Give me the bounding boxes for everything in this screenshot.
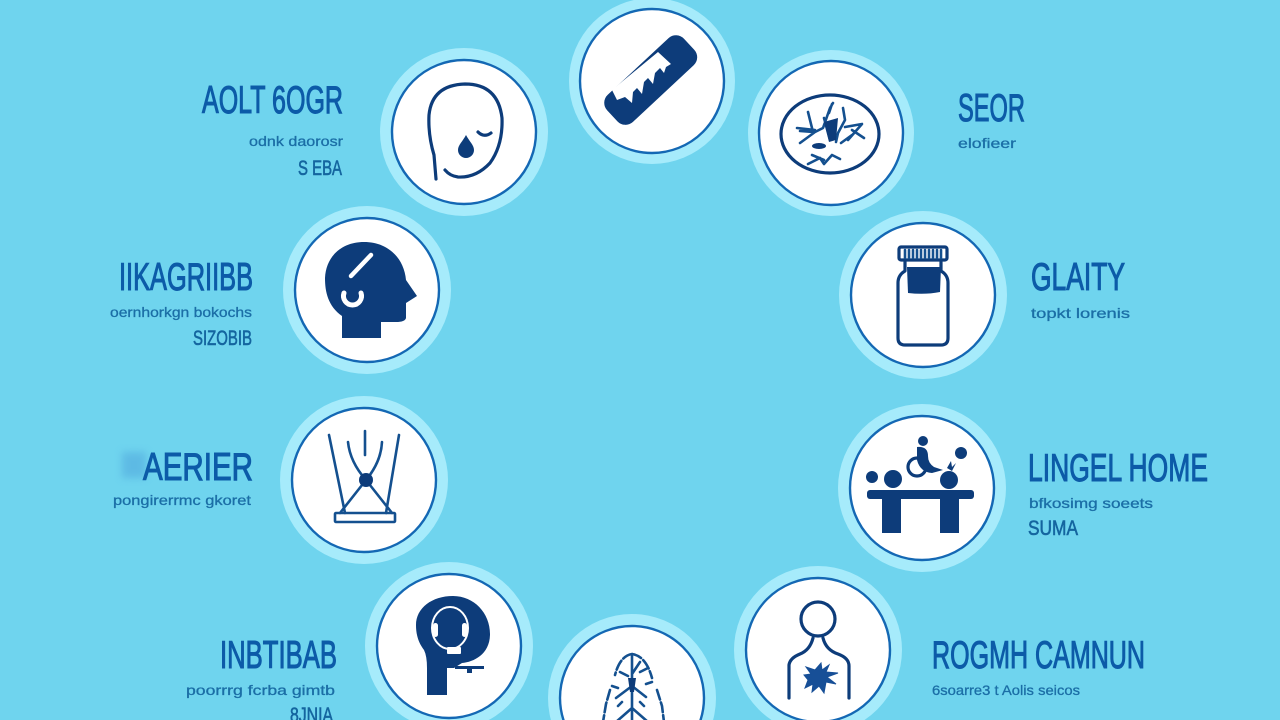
ring xyxy=(839,211,1007,379)
heading: GLAITY xyxy=(1031,256,1125,299)
ring xyxy=(283,206,451,374)
disc xyxy=(746,578,890,720)
subtext: odnk daorosr xyxy=(249,133,343,149)
icon: hanging swing xyxy=(329,431,399,522)
disc xyxy=(851,223,995,367)
disc xyxy=(850,416,994,560)
tag: SUMA xyxy=(1028,517,1078,540)
icon: face with tear xyxy=(429,84,502,179)
ring xyxy=(748,50,914,216)
tag: S EBA xyxy=(298,157,342,180)
icon: lung tree xyxy=(603,654,664,720)
heading: IIKAGRIIBB xyxy=(119,256,253,299)
subtext: 6soarre3 t Aolis seicos xyxy=(932,682,1080,698)
item: bottom left headset node xyxy=(186,562,533,720)
ring xyxy=(838,404,1006,572)
icon: person with burst xyxy=(789,602,849,698)
blurred glow xyxy=(122,452,146,478)
tag: SIZOBIB xyxy=(193,327,252,350)
disc xyxy=(392,60,536,204)
disc xyxy=(292,408,436,552)
disc xyxy=(377,574,521,718)
icon: bandage ruler xyxy=(600,31,702,129)
subtext: elofieer xyxy=(958,135,1016,151)
item: left head node xyxy=(110,206,451,374)
heading: SEOR xyxy=(958,87,1025,130)
subtext: oernhorkgn bokochs xyxy=(110,304,252,320)
ring xyxy=(548,614,716,720)
icon: cracked oval xyxy=(781,95,879,173)
item: top bandage node xyxy=(569,0,735,164)
icon: headset silhouette xyxy=(416,596,490,695)
icon: bottle xyxy=(898,247,948,345)
subtext: bfkosimg soeets xyxy=(1029,495,1153,511)
item: top left face node xyxy=(202,48,548,216)
ring xyxy=(569,0,735,164)
heading: ROGMH CAMNUN xyxy=(932,634,1145,677)
item: top right node xyxy=(748,50,1025,216)
ring xyxy=(734,566,902,720)
icon: head silhouette xyxy=(325,242,417,338)
subtext: poorrrg fcrba gimtb xyxy=(186,682,335,698)
item: bottom lung node xyxy=(548,614,716,720)
ring xyxy=(280,396,448,564)
item: right table node xyxy=(838,404,1208,572)
disc xyxy=(295,218,439,362)
heading: INBTIBAB xyxy=(220,634,337,677)
disc xyxy=(580,9,724,153)
item: bottom right person node xyxy=(734,566,1145,720)
heading: AOLT 6OGR xyxy=(202,79,343,122)
ring xyxy=(380,48,548,216)
icon: table with wheelchair figure xyxy=(866,436,974,533)
disc xyxy=(560,626,704,720)
ring xyxy=(365,562,533,720)
item: right bottle node xyxy=(839,211,1130,379)
subtext: pongirerrmc gkoret xyxy=(113,492,251,508)
disc xyxy=(759,61,903,205)
subtext: topkt lorenis xyxy=(1031,305,1130,321)
heading: AERIER xyxy=(143,446,253,489)
item: left hanger node xyxy=(113,396,448,564)
